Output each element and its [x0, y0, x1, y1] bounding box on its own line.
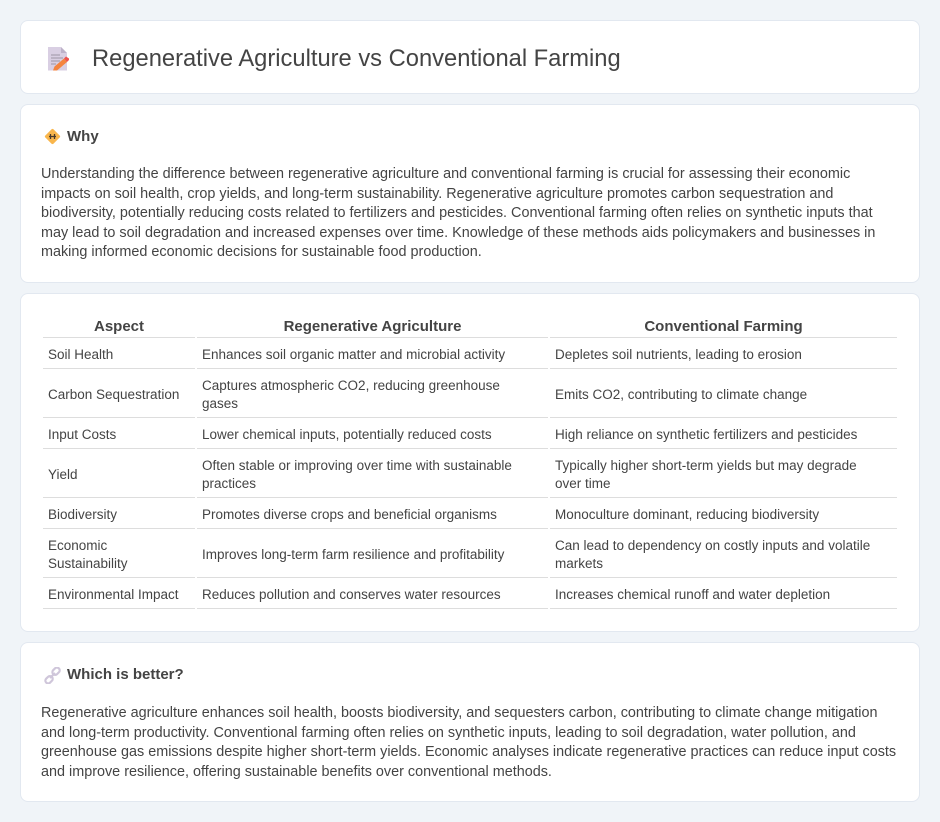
- text: which is better paragraph: Regenerative agriculture enhances soil health, boosts biodiversity, and sequesters carbon, contributing to climate change mitigation: [41, 705, 877, 721]
- heading: which is better: Which is better?: [67, 666, 184, 683]
- icon: document with pencil: [48, 47, 69, 70]
- table: aspect comparison: Yield: [48, 466, 78, 482]
- icon: chain link: [44, 667, 61, 684]
- table: aspect comparison: Carbon Sequestration: [48, 386, 179, 402]
- panel: which is better: [20, 642, 920, 802]
- table: aspect comparison: Monoculture dominant, reducing biodiversity: [555, 506, 819, 522]
- table: aspect comparison: Emits CO2, contributing to climate change: [555, 386, 807, 402]
- table: aspect comparison: gases: [202, 396, 238, 410]
- table: aspect comparison: Improves long-term farm resilience and profitability: [202, 546, 504, 562]
- text: why paragraph: biodiversity, potentially reducing costs related to fertilizers and pesticides. Conventional farming often relies on synthetic inputs that: [41, 205, 873, 221]
- table: aspect comparison: Sustainability: [48, 556, 128, 570]
- table: aspect comparison: Soil Health: [48, 346, 113, 362]
- text: which is better paragraph: and improve resilience, offering sustainable benefits over conventional methods.: [41, 764, 552, 780]
- icon: warning diamond: [44, 128, 60, 144]
- table: aspect comparison: Conventional Farming: [644, 318, 803, 335]
- table: aspect comparison: markets: [555, 556, 603, 570]
- text: why paragraph: impacts on soil health, crop yields, and long-term sustainability. Regenerative agriculture promotes carbon sequestration and: [41, 186, 833, 202]
- table: aspect comparison: Captures atmospheric CO2, reducing greenhouse: [202, 378, 500, 392]
- table: aspect comparison: Aspect: [94, 318, 144, 335]
- table: aspect comparison: Regenerative Agriculture: [284, 318, 461, 335]
- text: why paragraph: making informed economic decisions for sustainable food production.: [41, 244, 482, 260]
- text: why paragraph: [41, 166, 875, 260]
- table: aspect comparison: High reliance on synthetic fertilizers and pesticides: [555, 426, 857, 442]
- table: aspect comparison: Lower chemical inputs, potentially reduced costs: [202, 426, 492, 442]
- table: aspect comparison: Promotes diverse crops and beneficial organisms: [202, 506, 497, 522]
- panel: header: [20, 20, 920, 94]
- table: aspect comparison: Environmental Impact: [48, 586, 179, 602]
- table: aspect comparison: Typically higher short-term yields but may degrade: [555, 458, 857, 472]
- table: aspect comparison: Economic: [48, 538, 107, 552]
- text: which is better paragraph: greenhouse gas emissions despite higher short-term yields. Economic analyses indicate regenerative practices can reduce input costs: [41, 744, 896, 760]
- heading: why: Why: [67, 128, 99, 145]
- table: aspect comparison: Enhances soil organic matter and microbial activity: [202, 346, 505, 362]
- table: aspect comparison: Can lead to dependency on costly inputs and volatile: [555, 538, 870, 552]
- text: which is better paragraph: [41, 705, 896, 780]
- table: aspect comparison: [43, 318, 897, 609]
- table: aspect comparison: over time: [555, 476, 611, 490]
- table: aspect comparison: Depletes soil nutrients, leading to erosion: [555, 346, 802, 362]
- text: why paragraph: may lead to soil degradation and increased expenses over time. Knowledge of these methods aids policymakers and businesses in: [41, 225, 875, 241]
- title: Regenerative Agriculture vs Conventional Farming: [92, 46, 621, 72]
- panel: why: [20, 104, 920, 283]
- text: why paragraph: Understanding the difference between regenerative agriculture and conventional farming is crucial for assessing their economic: [41, 166, 850, 182]
- table: aspect comparison: Increases chemical runoff and water depletion: [555, 586, 830, 602]
- text: which is better paragraph: and long-term productivity. Conventional farming often relies on synthetic inputs, leading to soil degradation, water pollution, and: [41, 725, 856, 741]
- table: aspect comparison: Input Costs: [48, 426, 116, 442]
- table: aspect comparison: Biodiversity: [48, 506, 117, 522]
- table: aspect comparison: Often stable or improving over time with sustainable: [202, 458, 512, 472]
- panel: comparison table: [20, 293, 920, 632]
- table: aspect comparison: Reduces pollution and conserves water resources: [202, 586, 501, 602]
- table: aspect comparison: practices: [202, 476, 256, 490]
